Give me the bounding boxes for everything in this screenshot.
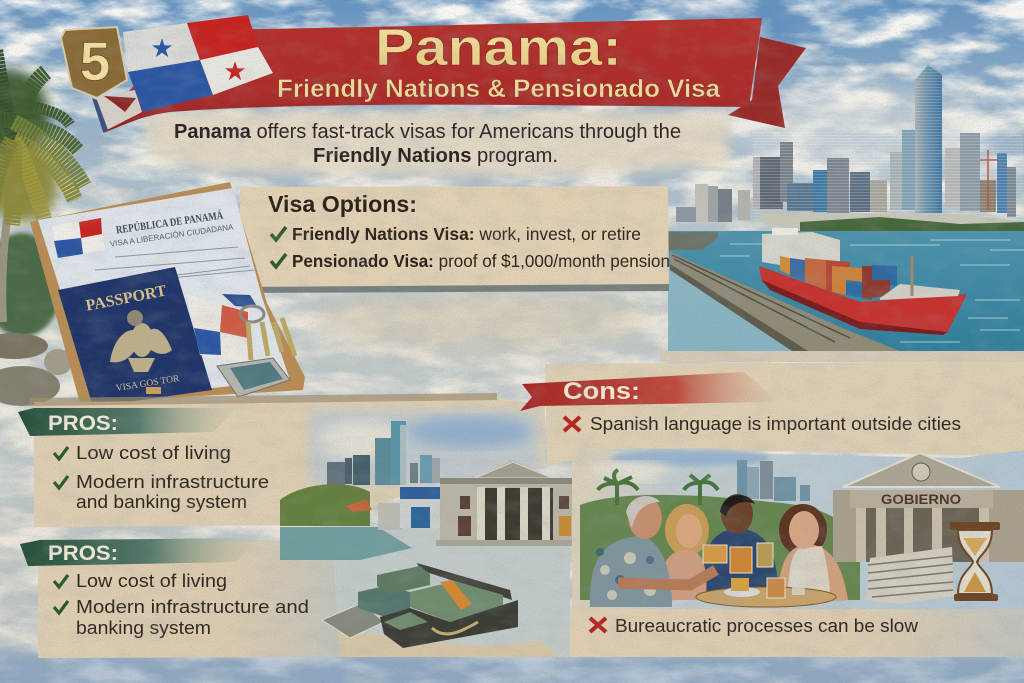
banner: pros heading: PROS: [48, 542, 118, 565]
intro parchment [142, 110, 732, 178]
passport: VISA GOS TOR [115, 374, 181, 394]
icon: number 5 badge: 5 [80, 30, 110, 92]
container ship [759, 228, 967, 335]
icon: keys [240, 306, 295, 360]
illustration: passport and visa documents [30, 182, 305, 407]
passport: PASSPORT [84, 282, 168, 315]
intro text [174, 121, 681, 167]
heading: visa options: Visa Options: [268, 191, 417, 217]
list item: modern infrastructure [54, 471, 269, 512]
list item: modern infrastructure: and banking system [76, 491, 247, 512]
water [668, 231, 1024, 351]
list item: pensionado visa: Pensionado Visa: proof of $1,000/month pension [292, 251, 670, 271]
person: man centre [700, 494, 778, 595]
title banner [103, 18, 806, 133]
title text: Panama: [375, 19, 622, 77]
list item: friendly nations visa: Friendly Nations Visa: work, invest, or retire [292, 224, 641, 244]
list item: modern infrastructure: Modern infrastructure [76, 471, 269, 492]
illustration: four friends toasting at a table [590, 494, 848, 607]
visa caption: VISA A LIBERACIÓN CIUDADANA [109, 222, 235, 249]
panel: pros one [18, 393, 545, 527]
panel: pros two [20, 528, 570, 658]
list item: low cost of living: Low cost of living [76, 442, 231, 463]
list item: modern infrastructure [54, 596, 309, 638]
list item: modern infrastructure: banking system [76, 617, 211, 638]
far towers [676, 184, 750, 222]
icon: stack of papers [866, 547, 954, 604]
intro text: Friendly Nations program. [313, 145, 558, 167]
banner: pros heading: PROS: [48, 412, 118, 435]
icon: passport flag [187, 294, 258, 362]
passport [58, 267, 212, 407]
illustration: suitcase of cash [322, 563, 518, 648]
bank sky [310, 410, 540, 485]
panel: cons bottom [570, 609, 1024, 657]
banner: cons heading [520, 372, 780, 411]
icon: calculator [217, 358, 290, 397]
icon: small flag behind badge [92, 90, 142, 132]
list item: spanish language: Spanish language is important outside cities [590, 413, 961, 434]
person: woman right [778, 504, 848, 605]
illustration: bank building and city [280, 421, 586, 560]
banner: pros heading [20, 538, 258, 566]
icon: Panama flag [123, 15, 273, 112]
title text: Friendly Nations & Pensionado Visa [277, 75, 721, 103]
pier [670, 252, 900, 351]
icon: Panama flag: ★ [223, 56, 247, 86]
skyline centre [753, 130, 1023, 220]
breakwater [668, 232, 718, 250]
label: gobierno: GOBIERNO [881, 491, 961, 507]
icon: small flag [52, 218, 105, 258]
person: woman blonde [658, 504, 709, 600]
list item: modern infrastructure: Modern infrastructure and [76, 596, 309, 617]
panel: cons top [520, 351, 1024, 466]
icon: hourglass [950, 522, 1000, 601]
icon: palm tree [0, 50, 84, 337]
banner: pros heading [18, 408, 236, 436]
icon: raised drinks [703, 543, 773, 573]
banner: cons heading: Cons: [563, 378, 640, 405]
heading: republica de panama: REPÚBLICA DE PANAMÁ [115, 210, 224, 236]
list item: bureaucratic processes: Bureaucratic processes can be slow [615, 615, 919, 636]
illustration: city skyline and harbour [668, 65, 1024, 351]
table with glasses [696, 561, 836, 607]
main tower [915, 65, 942, 213]
shoreline [760, 212, 1024, 232]
intro text: Panama offers fast-track visas for Americans through the [174, 121, 681, 143]
title text [277, 19, 721, 103]
icon: number 5 badge [61, 27, 127, 98]
panel: visa options [240, 186, 670, 293]
icon: Panama flag: ★ [150, 33, 174, 63]
containers [780, 256, 897, 300]
illustration: government building and skyline [572, 450, 1024, 610]
list item: low cost of living: Low cost of living [76, 570, 227, 591]
person: man left [590, 496, 716, 607]
rocks [0, 333, 72, 406]
